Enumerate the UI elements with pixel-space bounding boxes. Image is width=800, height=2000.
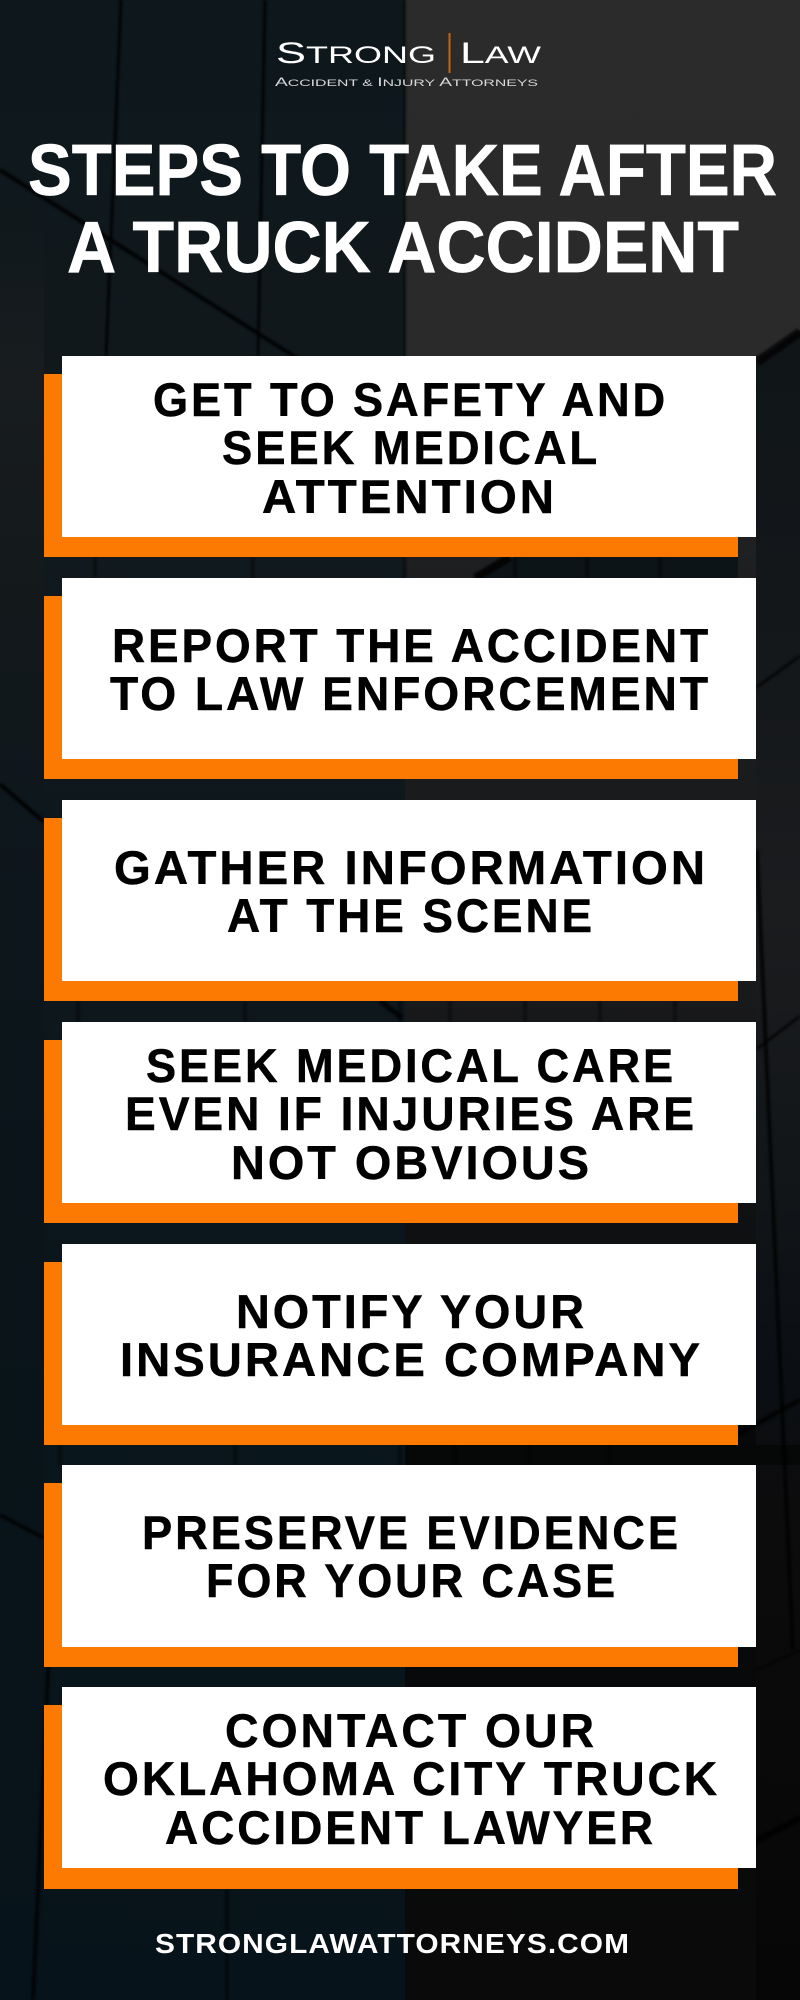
panel: step 6: PRESERVE EVIDENCE: [142, 1506, 681, 1559]
title: A TRUCK ACCIDENT: [67, 208, 739, 288]
panel: step 7: ACCIDENT LAWYER: [165, 1801, 656, 1854]
panel: step 5: [44, 1244, 756, 1445]
panel: step 5: NOTIFY YOUR: [236, 1285, 587, 1338]
logo: Strong Law: [275, 33, 541, 89]
panel: step 3: [44, 800, 756, 1001]
panel: step 2: REPORT THE ACCIDENT: [112, 619, 711, 672]
panel: step 2: TO LAW ENFORCEMENT: [110, 667, 711, 720]
panel: step 2: [44, 578, 756, 779]
panel: step 7: [44, 1687, 756, 1889]
panel: step 1: [44, 356, 756, 557]
panel: step 3: GATHER INFORMATION: [114, 841, 708, 894]
panel: step 1: SEEK MEDICAL: [222, 421, 600, 474]
panel: step 7: OKLAHOMA CITY TRUCK: [103, 1752, 720, 1805]
logo: Strong Law: A CCIDENT & INJURY A TTORNEYS: [275, 77, 538, 89]
title: [28, 131, 777, 288]
panel: step 1: GET TO SAFETY AND: [153, 373, 668, 426]
panel: step 6: FOR YOUR CASE: [206, 1554, 618, 1607]
panel: step 4: SEEK MEDICAL CARE: [146, 1039, 676, 1092]
footer: website: STRONGLAWATTORNEYS.COM: [155, 1928, 630, 1959]
panel: step 5: INSURANCE COMPANY: [120, 1333, 703, 1386]
panel: step 4: [44, 1022, 756, 1223]
logo: Strong Law: S TRONG: [276, 37, 436, 70]
panel: step 7: CONTACT OUR: [225, 1704, 597, 1757]
panel: step 1: ATTENTION: [262, 470, 557, 523]
panel: step 4: EVEN IF INJURIES ARE: [125, 1087, 697, 1140]
panel: step 6: [44, 1465, 756, 1667]
panel: step 4: NOT OBVIOUS: [231, 1136, 592, 1189]
logo: Strong Law: L AW: [460, 37, 541, 70]
panel: step 3: AT THE SCENE: [227, 889, 595, 942]
